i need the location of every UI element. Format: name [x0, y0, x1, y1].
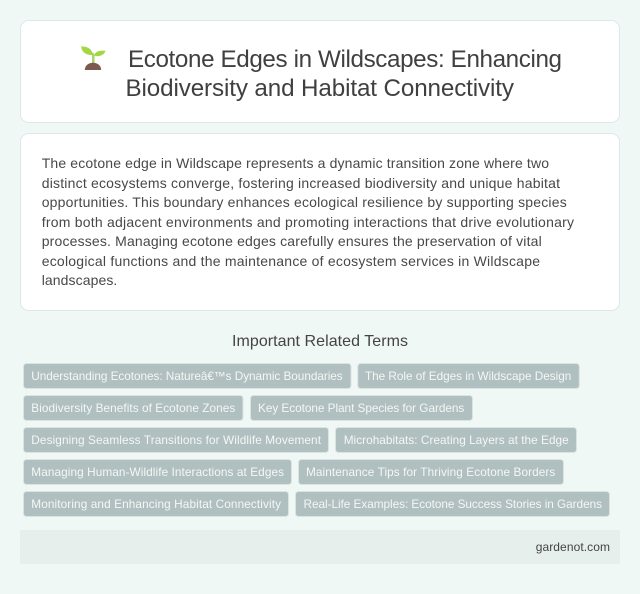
- text block: description paragraph: [42, 155, 574, 288]
- chip: key plant species: Key Ecotone Plant Species for Gardens: [258, 401, 464, 415]
- text block: description paragraph: The ecotone edge in Wildscape represents a dynamic transition zone where two: [42, 155, 549, 171]
- chip: biodiversity benefits: Biodiversity Benefits of Ecotone Zones: [31, 401, 235, 415]
- panel: title card: [20, 20, 620, 122]
- text block: description paragraph: distinct ecosystems converge, fostering increased biodiversity and unique habitat: [42, 175, 560, 191]
- chip: understanding ecotones: [24, 364, 351, 388]
- chip: maintenance tips: Maintenance Tips for Thriving Ecotone Borders: [306, 465, 555, 479]
- chip: role of edges: [358, 364, 579, 388]
- chip: real-life examples: Real-Life Examples: Ecotone Success Stories in Gardens: [304, 497, 602, 511]
- panel: related term chips: [24, 364, 610, 516]
- chip: microhabitats: Microhabitats: Creating Layers at the Edge: [344, 433, 569, 447]
- text block: description paragraph: landscapes.: [42, 272, 117, 288]
- footer: gardenot.com: [536, 540, 610, 554]
- chip: biodiversity benefits: [24, 396, 243, 420]
- heading: related terms: Important Related Terms: [232, 333, 408, 350]
- title: [126, 46, 562, 102]
- chip: monitoring connectivity: Monitoring and Enhancing Habitat Connectivity: [31, 497, 281, 511]
- icon: seedling: [81, 46, 106, 70]
- title: Biodiversity and Habitat Connectivity: [126, 75, 515, 102]
- text block: description paragraph: ecological functions and the maintenance of ecosystem services in Wildscape: [42, 253, 540, 269]
- title: Ecotone Edges in Wildscapes: Enhancing: [128, 46, 562, 73]
- text block: description paragraph: opportunities. This boundary enhances ecological resilience by supporting species: [42, 194, 567, 210]
- text block: description paragraph: processes. Managing ecotone edges carefully ensures the preservation of vital: [42, 233, 542, 249]
- chip: key plant species: [250, 396, 472, 420]
- panel: description: [20, 134, 620, 310]
- chip: maintenance tips: [298, 460, 564, 484]
- chip: human-wildlife interactions: Managing Human-Wildlife Interactions at Edges: [31, 465, 284, 479]
- chip: human-wildlife interactions: [24, 460, 292, 484]
- text block: description paragraph: from both adjacent environments and promoting interactions that drive evolutionary: [42, 214, 574, 230]
- chip: seamless transitions: [24, 428, 328, 452]
- chip: monitoring connectivity: [24, 492, 288, 516]
- chip: role of edges: The Role of Edges in Wildscape Design: [365, 369, 571, 383]
- chip: seamless transitions: Designing Seamless Transitions for Wildlife Movement: [31, 433, 322, 447]
- footer: [20, 530, 620, 564]
- chip: understanding ecotones: Understanding Ecotones: Natureâ€™s Dynamic Boundaries: [31, 369, 343, 383]
- chip: microhabitats: [336, 428, 576, 452]
- chip: real-life examples: [296, 492, 610, 516]
